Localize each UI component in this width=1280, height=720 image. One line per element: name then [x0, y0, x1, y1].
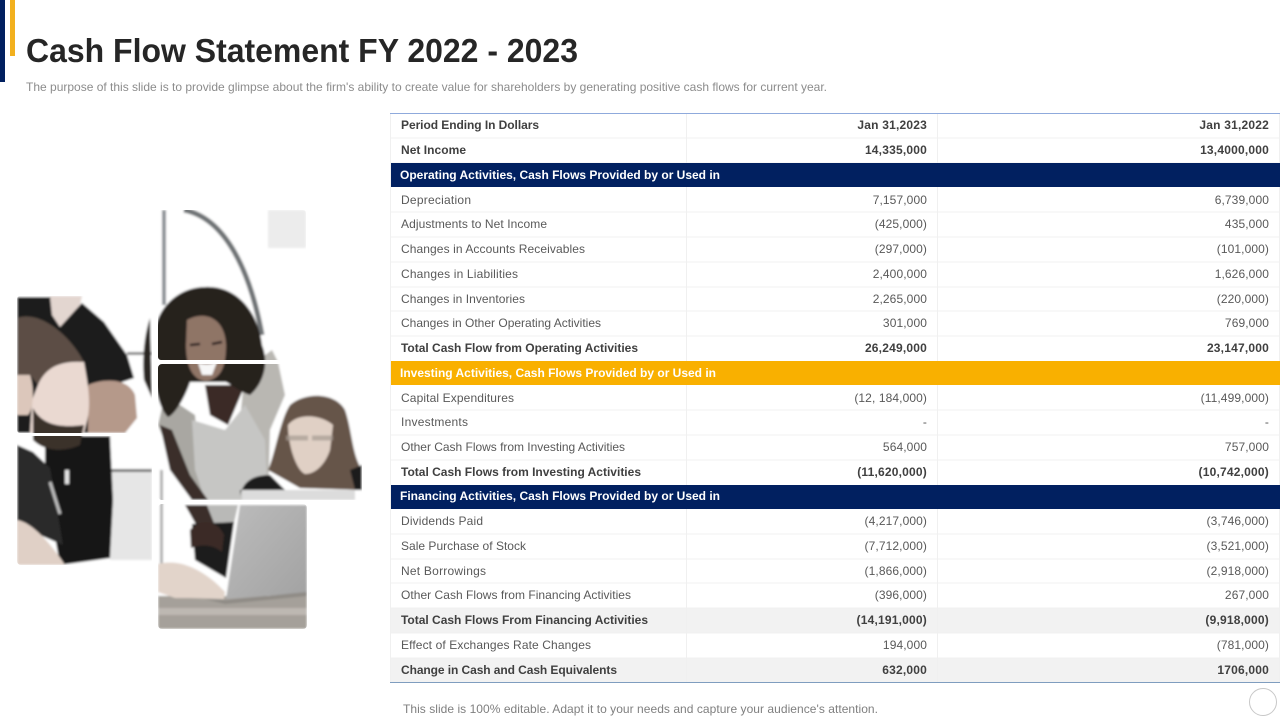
- laughing woman hair and face: [153, 287, 265, 417]
- row: dividends: [401, 514, 1269, 528]
- row: total financing: (9,918,000): [1205, 613, 1269, 627]
- row: period header: [401, 118, 1269, 132]
- row: stock: Sale Purchase of Stock: [401, 539, 527, 553]
- circle marker: [1250, 688, 1276, 716]
- row: liabilities: Changes in Liabilities: [401, 267, 518, 281]
- row: investments: -: [923, 415, 927, 429]
- row: adjustments: Adjustments to Net Income: [401, 217, 547, 231]
- row: total investing: Total Cash Flows from Investing Activities: [401, 465, 641, 479]
- row: inventories: [401, 292, 1269, 306]
- window and background: [162, 210, 166, 305]
- subtitle: The purpose of this slide is to provide glimpse about the firm's ability to create value for shareholders by generating positive cash flows for current year.: [26, 80, 827, 94]
- row: adjustments: (425,000): [875, 217, 927, 231]
- row: capital expenditures: (11,499,000): [1201, 391, 1269, 405]
- row: other operating: [401, 316, 1269, 330]
- back man shirt: [17, 297, 134, 433]
- row: exchange rate effect: [401, 638, 1269, 652]
- row: stock: (3,521,000): [1207, 539, 1269, 553]
- band: investing activities: [391, 361, 1280, 385]
- row: capital expenditures: Capital Expenditures: [401, 391, 514, 405]
- row: total financing: Total Cash Flows From Financing Activities: [401, 613, 648, 627]
- row: exchange rate effect: Effect of Exchanges Rate Changes: [401, 638, 591, 652]
- row: depreciation: 7,157,000: [873, 193, 927, 207]
- row: exchange rate effect: (781,000): [1217, 638, 1269, 652]
- row: inventories: (220,000): [1217, 292, 1269, 306]
- row: stock: (7,712,000): [865, 539, 927, 553]
- row: exchange rate effect: 194,000: [883, 638, 927, 652]
- row: adjustments: [401, 217, 1269, 231]
- row: net borrowings: (2,918,000): [1207, 564, 1269, 578]
- row: total operating: [401, 341, 1269, 355]
- row: investments: Investments: [401, 415, 468, 429]
- row: change in cash: [401, 663, 1269, 677]
- row: net income: Net Income: [401, 143, 466, 157]
- row: capital expenditures: (12, 184,000): [854, 391, 927, 405]
- row: depreciation: [401, 193, 1269, 207]
- row: other operating: Changes in Other Operating Activities: [401, 316, 601, 330]
- row: period header: Jan 31,2023: [857, 118, 927, 132]
- row: accounts receivables: (297,000): [875, 242, 927, 256]
- row: liabilities: 2,400,000: [873, 267, 927, 281]
- row: total investing: [401, 465, 1269, 479]
- row: inventories: 2,265,000: [873, 292, 927, 306]
- row: other financing: [401, 588, 1269, 602]
- table grid: [390, 114, 1280, 683]
- front man shirt and arm: [17, 445, 63, 545]
- row: stock: [401, 539, 1269, 553]
- row: other operating: 301,000: [883, 316, 927, 330]
- row: change in cash: 1706,000: [1217, 663, 1269, 677]
- seated woman: [268, 396, 362, 490]
- row: period header: Period Ending In Dollars: [401, 118, 539, 132]
- photo collage: team around a laptop: [17, 210, 362, 629]
- table row shading: [390, 608, 1280, 683]
- row: other financing: 267,000: [1225, 588, 1269, 602]
- band: operating activities: [391, 163, 1280, 187]
- row: dividends: Dividends Paid: [401, 514, 483, 528]
- row: other investing: [401, 440, 1269, 454]
- row: other financing: (396,000): [875, 588, 927, 602]
- table: [390, 113, 1280, 683]
- row: liabilities: 1,626,000: [1215, 267, 1269, 281]
- row: depreciation: 6,739,000: [1215, 193, 1269, 207]
- row: adjustments: 435,000: [1225, 217, 1269, 231]
- row: dividends: (4,217,000): [865, 514, 927, 528]
- row: total financing: (14,191,000): [857, 613, 927, 627]
- row: dividends: (3,746,000): [1207, 514, 1269, 528]
- lower figure and laptop: [185, 505, 215, 528]
- row: other investing: Other Cash Flows from Investing Activities: [401, 440, 625, 454]
- row: capital expenditures: [401, 391, 1269, 405]
- hair at right edge of left tile: [143, 318, 152, 398]
- table bottom rule: [390, 682, 1280, 683]
- row: total operating: 26,249,000: [865, 341, 927, 355]
- band: investing activities: Investing Activities, Cash Flows Provided by or Used in: [400, 366, 716, 380]
- row: inventories: Changes in Inventories: [401, 292, 525, 306]
- row: total investing: (11,620,000): [857, 465, 927, 479]
- front man head: [17, 316, 84, 385]
- row: total operating: Total Cash Flow from Operating Activities: [401, 341, 638, 355]
- row: other investing: 564,000: [883, 440, 927, 454]
- row: total financing: [401, 613, 1269, 627]
- row: net borrowings: [401, 564, 1269, 578]
- row: net income: 14,335,000: [865, 143, 927, 157]
- band: financing activities: [391, 485, 1280, 509]
- row: other financing: Other Cash Flows from Financing Activities: [401, 588, 631, 602]
- row: accounts receivables: Changes in Accounts Receivables: [401, 242, 585, 256]
- row: other operating: 769,000: [1225, 316, 1269, 330]
- row: net income: 13,4000,000: [1200, 143, 1269, 157]
- row: depreciation: Depreciation: [401, 193, 471, 207]
- row: investments: [401, 415, 1269, 429]
- row: change in cash: 632,000: [882, 663, 927, 677]
- accent bar: gold: [10, 0, 15, 56]
- band: operating activities: Operating Activities, Cash Flows Provided by or Used in: [400, 168, 720, 182]
- row: period header: Jan 31,2022: [1199, 118, 1269, 132]
- band: financing activities: Financing Activities, Cash Flows Provided by or Used in: [400, 489, 720, 503]
- accent bar: navy: [0, 0, 5, 82]
- row: total operating: 23,147,000: [1207, 341, 1269, 355]
- row: net income: [401, 143, 1269, 157]
- title: Cash Flow Statement FY 2022 - 2023: [26, 32, 578, 69]
- row: other investing: 757,000: [1225, 440, 1269, 454]
- footer note: This slide is 100% editable. Adapt it to your needs and capture your audience's attention.: [403, 702, 878, 716]
- row: liabilities: [401, 267, 1269, 281]
- laughing woman body: [158, 404, 203, 492]
- row: net borrowings: Net Borrowings: [401, 564, 486, 578]
- row: accounts receivables: (101,000): [1217, 242, 1269, 256]
- table top rule: [390, 113, 1280, 114]
- row: investments: -: [1265, 415, 1269, 429]
- row: total investing: (10,742,000): [1199, 465, 1269, 479]
- row: accounts receivables: [401, 242, 1269, 256]
- row: net borrowings: (1,866,000): [865, 564, 927, 578]
- row: change in cash: Change in Cash and Cash Equivalents: [401, 663, 617, 677]
